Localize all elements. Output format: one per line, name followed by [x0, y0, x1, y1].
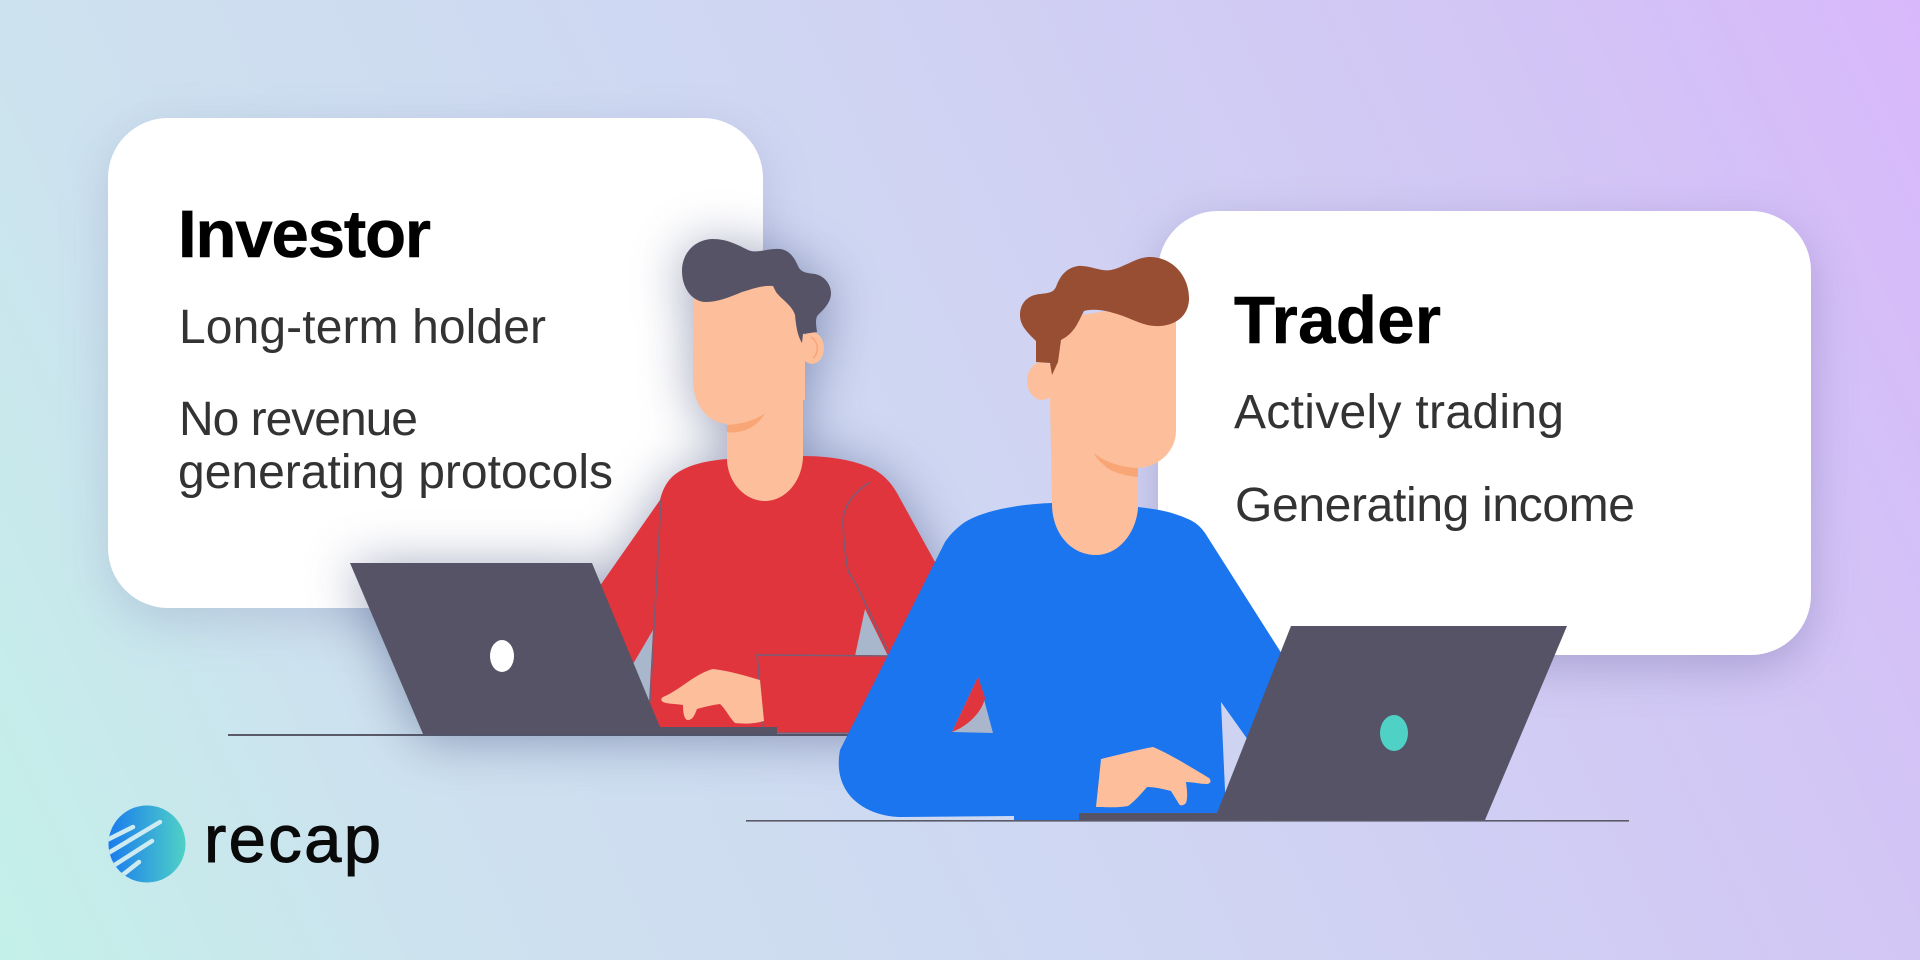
- sweater gap: right: [855, 609, 888, 656]
- sweater seams: [650, 482, 888, 702]
- text: no revenue generating protocols: [178, 393, 613, 499]
- red sweater: [590, 456, 1000, 733]
- smile: [1094, 453, 1138, 477]
- desk line: investor: [228, 734, 1038, 736]
- text: no revenue generating protocols: generating protocols: [178, 446, 613, 499]
- smile: [727, 413, 765, 432]
- heading: Trader: Trader: [1234, 283, 1441, 358]
- laptop logo: white dot: [490, 640, 514, 672]
- laptop logo: teal dot: [1380, 715, 1408, 751]
- ear: [800, 332, 824, 364]
- character: investor: [228, 239, 1038, 736]
- blue sweater: [839, 503, 1300, 820]
- text: long-term holder: Long-term holder: [179, 301, 546, 354]
- text: generating income: Generating income: [1235, 479, 1635, 532]
- panel: trader card: [1158, 211, 1811, 655]
- sweater gap: right arm: [1221, 702, 1248, 812]
- figure: investor with shadow: [350, 239, 1000, 734]
- logo: recap: [105, 802, 381, 882]
- sweater gap: left: [633, 630, 660, 728]
- hand: [661, 669, 764, 724]
- logo icon: [105, 806, 186, 882]
- laptop: trader: [1079, 626, 1567, 820]
- hair: [1020, 257, 1189, 375]
- desk line: trader: [746, 820, 1629, 822]
- forearm: [757, 655, 900, 733]
- character: trader: [746, 257, 1629, 822]
- red elbow in gap: [952, 677, 985, 732]
- logo wordmark: recap: [204, 802, 381, 877]
- hair: [682, 239, 831, 343]
- hand: [1096, 747, 1210, 807]
- panel: investor card: [108, 118, 763, 608]
- text: no revenue generating protocols: No revenue: [179, 393, 418, 446]
- text: actively trading: Actively trading: [1234, 386, 1564, 439]
- sweater gap: left arm: [952, 677, 993, 733]
- heading: Investor: Investor: [178, 197, 431, 272]
- neck and face: [1050, 300, 1176, 555]
- neck and face: [693, 280, 805, 501]
- laptop: investor: [350, 563, 777, 734]
- ear: [1027, 362, 1057, 400]
